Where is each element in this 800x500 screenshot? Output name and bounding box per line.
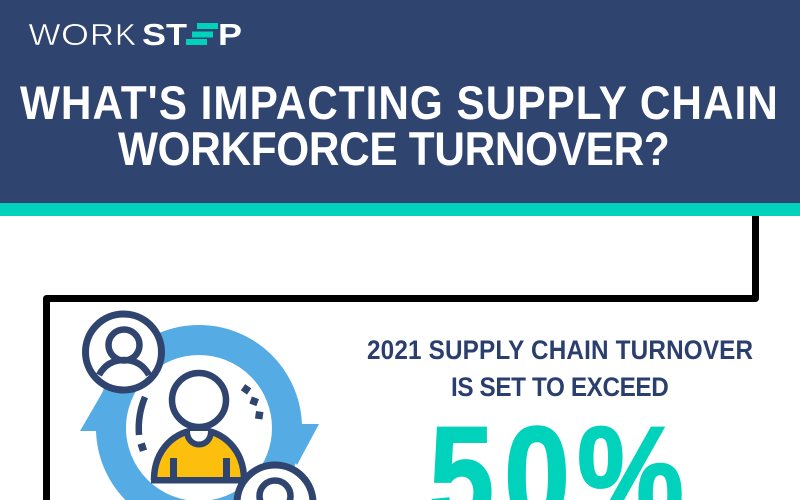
turnover statement: 2021 SUPPLY CHAIN TURNOVER <box>367 336 754 365</box>
header banner <box>0 0 800 216</box>
title <box>20 86 775 166</box>
logo: WorkStep: P <box>218 17 242 52</box>
icon: workforce turnover cycle <box>80 314 319 500</box>
connector line <box>46 216 756 500</box>
title: WHAT'S IMPACTING SUPPLY CHAIN <box>20 78 778 130</box>
logo: WorkStep: K <box>115 17 136 52</box>
icon: top-left avatar <box>86 314 162 390</box>
logo: WorkStep <box>28 23 241 46</box>
turnover statement <box>368 340 752 396</box>
icon: motion dashes <box>138 384 263 452</box>
logo: WorkStep: O <box>61 17 89 52</box>
logo: WorkStep: R <box>90 17 114 52</box>
logo: WorkStep: W <box>28 17 61 52</box>
turnover statement: IS SET TO EXCEED <box>451 373 669 402</box>
title: WORKFORCE TURNOVER? <box>118 124 670 176</box>
icon: circular arrows <box>80 340 319 500</box>
statistic: 50% <box>432 425 682 500</box>
logo: WorkStep: T <box>166 17 187 52</box>
icon: central worker <box>151 373 247 484</box>
logo: WorkStep: S <box>142 17 166 52</box>
icon: bottom-right avatar <box>237 465 313 500</box>
